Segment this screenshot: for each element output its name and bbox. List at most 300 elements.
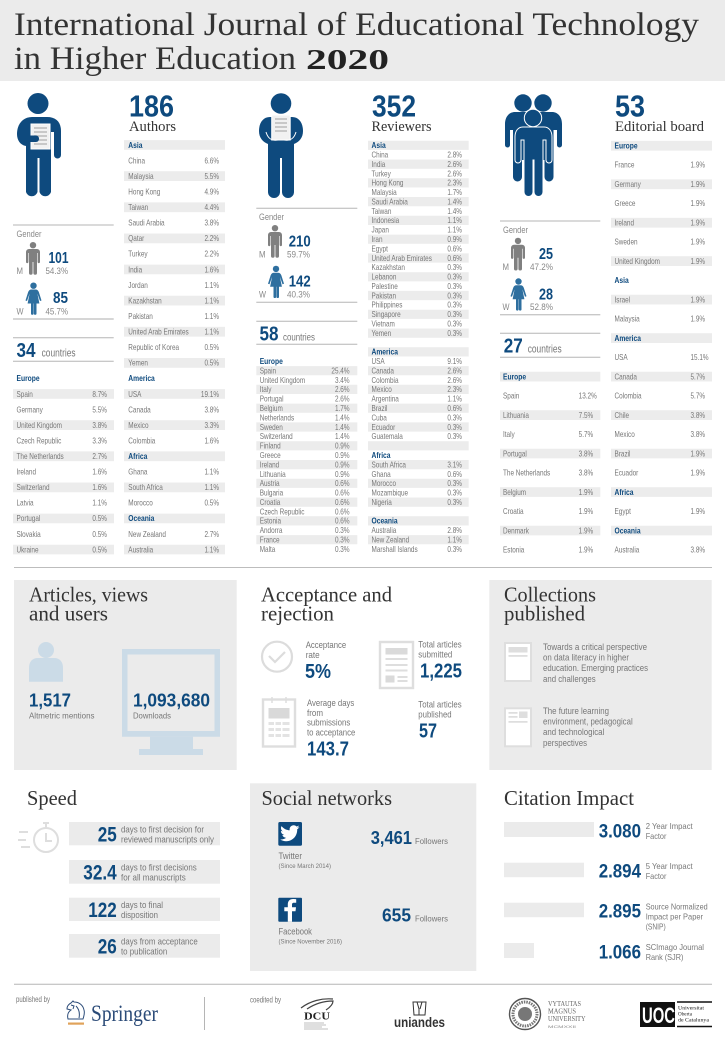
authors list: Europe: Spain xyxy=(16,389,33,399)
editorial board countries count xyxy=(500,333,600,358)
reviewers list: Asia, America, Africa, Oceania: 0.3% xyxy=(447,544,462,554)
citation row: 5 year impact factor: Factor xyxy=(646,871,667,881)
citation row: 2 year impact factor: 2 Year Impact xyxy=(646,821,693,831)
reviewers list: Asia, America, Africa, Oceania: 0.3% xyxy=(447,281,462,291)
editorial board list: Europe, Asia, America, Africa, Oceania: Mexico xyxy=(614,429,635,439)
editorial board list: Europe countries: Europe xyxy=(503,372,526,382)
text: collection 2: and technological xyxy=(543,727,604,737)
reviewers list: Asia, America, Africa, Oceania: Ghana xyxy=(372,469,392,479)
authors list: Europe: 5.5% xyxy=(92,405,107,415)
editorial board list: Europe, Asia, America, Africa, Oceania: 1.9% xyxy=(691,506,706,516)
editorial board list: Europe, Asia, America, Africa, Oceania: United Kingdom xyxy=(614,256,660,266)
reviewers list: Asia, America, Africa, Oceania: Brazil xyxy=(372,403,388,413)
authors list: Asia, America, Africa, Oceania: India xyxy=(128,265,143,275)
stat: total articles published: 57 xyxy=(419,720,437,742)
logo: Springer xyxy=(67,1001,158,1026)
authors list: Asia, America, Africa, Oceania: 0.5% xyxy=(204,358,220,368)
heading: articles, views and users xyxy=(29,583,148,626)
citation row: SJR: SCImago Journal xyxy=(646,942,704,952)
authors list: Asia, America, Africa, Oceania: 4.9% xyxy=(204,187,220,197)
authors list: Asia, America, Africa, Oceania: Africa xyxy=(128,451,148,461)
reviewers list: Europe: Greece xyxy=(260,450,281,460)
reviewers list: Europe: 1.4% xyxy=(335,413,350,423)
reviewers countries count: countries xyxy=(283,332,315,344)
authors list: Europe: 3.8% xyxy=(92,420,107,430)
authors list: Europe: 0.5% xyxy=(92,529,107,539)
authors list: Asia, America, Africa, Oceania: Qatar xyxy=(128,233,145,243)
panel: collections published xyxy=(489,580,712,770)
stat: downloads xyxy=(133,690,210,720)
editorial board list: Europe, Asia, America, Africa, Oceania: 1.9% xyxy=(691,198,706,208)
reviewers list: Asia, America, Africa, Oceania: Palestine xyxy=(372,281,398,291)
editorial board list: Europe countries: 1.9% xyxy=(579,506,594,516)
editorial board list: Europe countries: 3.8% xyxy=(579,468,594,478)
citation row: SNIP xyxy=(504,902,708,932)
citation row: SNIP: (SNIP) xyxy=(646,922,666,932)
authors list: Asia, America, Africa, Oceania: 2.2% xyxy=(204,233,220,243)
authors gender block: W xyxy=(16,306,24,317)
editorial board list: Europe, Asia, America, Africa, Oceania: Egypt xyxy=(614,506,631,516)
authors list: Asia, America, Africa, Oceania: Colombia xyxy=(128,436,156,446)
editorial board list: Europe countries: 1.9% xyxy=(579,545,594,555)
icon: reviewer holding paper xyxy=(259,93,303,198)
authors list: Asia, America, Africa, Oceania: 1.1% xyxy=(204,545,220,555)
twitter block: Twitter xyxy=(278,851,302,861)
title banner: International Journal of Educational Technology xyxy=(14,7,700,43)
stat: total articles published: Total articles xyxy=(418,700,462,710)
authors list: Asia, America, Africa, Oceania: Ghana xyxy=(128,467,148,477)
reviewers list: Asia, America, Africa, Oceania: 1.1% xyxy=(447,225,462,235)
reviewers list: Europe: Finland xyxy=(260,441,281,451)
editorial board list: Europe countries: Lithuania xyxy=(503,410,530,420)
authors list: Asia, America, Africa, Oceania: 4.4% xyxy=(204,202,220,212)
reviewers list: Asia, America, Africa, Oceania: Canada xyxy=(372,366,395,376)
authors list: Asia, America, Africa, Oceania: United Arab Emirates xyxy=(128,327,189,337)
facebook block: Facebook xyxy=(278,926,312,936)
stat: facebook followers: 655 xyxy=(382,905,411,925)
reviewers list: Asia, America, Africa, Oceania: 1.7% xyxy=(447,187,462,197)
editorial board headline number: 53 xyxy=(615,88,645,124)
reviewers list: Europe: 2.6% xyxy=(335,394,350,404)
reviewers gender block: 40.3% xyxy=(287,290,310,301)
authors list: Asia, America, Africa, Oceania: 3.3% xyxy=(204,420,220,430)
authors list: Asia, America, Africa, Oceania: 1.1% xyxy=(204,311,220,321)
reviewers list: Asia, America, Africa, Oceania: Argentina xyxy=(372,394,400,404)
stat: acceptance rate: Acceptance xyxy=(306,640,346,650)
reviewers list: Asia, America, Africa, Oceania: Vietnam xyxy=(372,319,395,329)
editorial board list: Europe countries: 3.8% xyxy=(579,449,594,459)
reviewers list: Europe: 0.9% xyxy=(335,441,350,451)
authors list: Asia, America, Africa, Oceania: 3.8% xyxy=(204,405,220,415)
reviewers list: Asia, America, Africa, Oceania: Morocco xyxy=(372,478,396,488)
heading: speed: Speed xyxy=(27,786,77,810)
editorial board list: Europe, Asia, America, Africa, Oceania: 3.8% xyxy=(691,545,706,555)
speed row 3 xyxy=(69,898,220,922)
editorial board gender block: M xyxy=(502,262,509,273)
editorial board list: Europe, Asia, America, Africa, Oceania: Greece xyxy=(614,198,635,208)
reviewers list: Europe: 0.6% xyxy=(335,516,350,526)
editorial board gender block: 25 xyxy=(539,246,553,263)
text: collection 2: The future learning xyxy=(543,706,609,716)
reviewers list: Asia, America, Africa, Oceania: 1.1% xyxy=(447,215,462,225)
panel: acceptance and rejection xyxy=(261,583,462,760)
reviewers list: Asia, America, Africa, Oceania: 0.3% xyxy=(447,422,462,432)
authors list: Europe: Germany xyxy=(16,405,43,415)
authors list: Asia, America, Africa, Oceania: Morocco xyxy=(128,498,153,508)
icon: document xyxy=(380,642,413,688)
reviewers list: Asia, America, Africa, Oceania: 2.3% xyxy=(447,178,462,188)
editorial board list: Europe countries: Italy xyxy=(503,429,515,439)
reviewers list: Asia, America, Africa, Oceania: Lebanon xyxy=(372,272,396,282)
reviewers list: Europe: 0.9% xyxy=(335,460,350,470)
editorial board list: Europe, Asia, America, Africa, Oceania: America xyxy=(614,333,642,343)
reviewers list: Asia, America, Africa, Oceania: 0.3% xyxy=(447,328,462,338)
stat: downloads: 1,093,680 xyxy=(133,690,210,710)
authors list: Europe: Switzerland xyxy=(16,482,50,492)
reviewers list: Asia, America, Africa, Oceania: Asia xyxy=(372,140,386,150)
citation row: 2 year impact factor xyxy=(504,821,693,842)
text: collection 1: Towards a critical perspective xyxy=(543,642,647,652)
authors list: Asia, America, Africa, Oceania: 0.5% xyxy=(204,498,220,508)
citation row: 2 year impact factor: Factor xyxy=(646,831,667,841)
authors list: Asia, America, Africa, Oceania: Republic of Korea xyxy=(128,342,180,352)
reviewers list: Europe: Italy xyxy=(260,384,272,394)
authors list: Asia, America, Africa, Oceania xyxy=(124,140,225,555)
authors list: Asia, America, Africa, Oceania: Saudi Arabia xyxy=(128,218,165,228)
authors list: Europe: Portugal xyxy=(16,513,41,523)
stat: twitter followers xyxy=(371,828,448,848)
logo: UOC: de Catalunya xyxy=(678,1018,710,1024)
title banner xyxy=(0,0,725,81)
text: collection 1 xyxy=(543,642,648,684)
authors list: Asia, America, Africa, Oceania: Taiwan xyxy=(128,202,148,212)
speed row 4: days from acceptance xyxy=(121,935,198,946)
reviewers list: Europe: 0.6% xyxy=(335,497,350,507)
reviewers list: Europe: Austria xyxy=(260,478,280,488)
authors list: Asia, America, Africa, Oceania: 1.1% xyxy=(204,482,220,492)
speed row 4: 26 xyxy=(98,936,117,958)
text: collection 2: environment, pedagogical xyxy=(543,716,633,726)
authors list: Asia, America, Africa, Oceania: South Africa xyxy=(128,482,164,492)
panel: articles, views and users xyxy=(14,580,237,770)
reviewers list: Europe: Ireland xyxy=(260,460,279,470)
reviewers list: Europe: Bulgaria xyxy=(260,488,284,498)
authors list: Asia, America, Africa, Oceania: Hong Kong xyxy=(128,187,160,197)
editorial board list: Europe, Asia, America, Africa, Oceania: 1.9% xyxy=(691,218,706,228)
logo: UOC: Universitat xyxy=(678,1006,704,1012)
reviewers gender block: 210 xyxy=(289,234,311,251)
reviewers list: Europe: Lithuania xyxy=(260,469,287,479)
editorial board list: Europe, Asia, America, Africa, Oceania: Europe xyxy=(614,141,638,151)
reviewers list: Asia, America, Africa, Oceania: Philippines xyxy=(372,300,403,310)
reviewers list: Asia, America, Africa, Oceania: 2.3% xyxy=(447,384,462,394)
reviewers list: Asia, America, Africa, Oceania: Egypt xyxy=(372,244,388,254)
reviewers list: Europe: Netherlands xyxy=(260,413,295,423)
authors list: Asia, America, Africa, Oceania: Asia xyxy=(128,140,143,150)
logo: UOC: Oberta xyxy=(678,1012,693,1018)
authors list: Europe: 2.7% xyxy=(92,451,107,461)
reviewers list: Asia, America, Africa, Oceania: 0.6% xyxy=(447,469,462,479)
stat: facebook followers xyxy=(382,905,448,925)
authors list: Asia, America, Africa, Oceania: 2.7% xyxy=(204,529,220,539)
heading: collections published xyxy=(504,583,596,626)
reviewers list: Asia, America, Africa, Oceania: Taiwan xyxy=(372,206,391,216)
editorial board list: Europe, Asia, America, Africa, Oceania: 3.8% xyxy=(691,410,706,420)
published by label: published by xyxy=(16,995,50,1004)
reviewers gender block: 59.7% xyxy=(287,250,310,261)
editorial board list: Europe, Asia, America, Africa, Oceania: Malaysia xyxy=(614,314,641,324)
editorial board list: Europe, Asia, America, Africa, Oceania: Brazil xyxy=(614,449,631,459)
reviewers list: Asia, America, Africa, Oceania: Iran xyxy=(372,234,383,244)
reviewers list: Asia, America, Africa, Oceania: 9.1% xyxy=(447,356,462,366)
editorial board list: Europe, Asia, America, Africa, Oceania: Chile xyxy=(614,410,629,420)
editorial board list: Europe countries: 1.9% xyxy=(579,487,594,497)
reviewers list: Asia, America, Africa, Oceania: Kazakhstan xyxy=(372,262,405,272)
editorial board list: Europe countries: Croatia xyxy=(503,506,524,516)
stat: altmetric mentions: 1,517 xyxy=(29,690,71,710)
reviewers list: Europe: United Kingdom xyxy=(260,375,305,385)
editorial board list: Europe, Asia, America, Africa, Oceania: Canada xyxy=(614,372,638,382)
stat: total articles published xyxy=(418,700,462,742)
editorial board list: Europe countries: 13.2% xyxy=(579,391,597,401)
reviewers list: Europe: Switzerland xyxy=(260,431,293,441)
coedited by label: coedited by xyxy=(250,996,281,1004)
editorial board list: Europe, Asia, America, Africa, Oceania: Ireland xyxy=(614,218,634,228)
reviewers list: Europe: Czech Republic xyxy=(260,507,305,517)
reviewers list: Europe: 0.9% xyxy=(335,450,350,460)
editorial board list: Europe, Asia, America, Africa, Oceania: Asia xyxy=(614,275,629,285)
editorial board list: Europe, Asia, America, Africa, Oceania: 1.9% xyxy=(691,256,706,266)
authors gender block: 45.7% xyxy=(46,306,68,317)
authors list: Asia, America, Africa, Oceania: 19.1% xyxy=(201,389,220,399)
editorial board gender block: 47.2% xyxy=(530,262,553,273)
panel: authors xyxy=(13,88,225,555)
editorial board list: Europe countries: 7.5% xyxy=(579,410,594,420)
heading: collections published: published xyxy=(504,602,585,626)
reviewers list: Asia, America, Africa, Oceania: 3.1% xyxy=(447,460,462,470)
reviewers list: Europe: 0.6% xyxy=(335,488,350,498)
reviewers list: Europe: Croatia xyxy=(260,497,281,507)
stat: twitter followers: Followers xyxy=(415,836,448,846)
heading: acceptance and rejection: rejection xyxy=(261,602,334,626)
stat: altmetric mentions: Altmetric mentions xyxy=(29,710,94,720)
reviewers list: Asia, America, Africa, Oceania: 1.1% xyxy=(447,535,462,545)
stat: average days from submissions to acceptance xyxy=(307,698,355,760)
logo: DCU: DCU xyxy=(304,1010,330,1022)
citation row: SJR xyxy=(504,942,704,964)
citation row: SJR: 1.066 xyxy=(599,942,641,964)
reviewers list: Asia, America, Africa, Oceania: Hong Kong xyxy=(372,178,403,188)
icon: monitor xyxy=(122,649,220,755)
reviewers list: Asia, America, Africa, Oceania: Indonesia xyxy=(372,215,400,225)
stat: altmetric mentions xyxy=(29,690,94,720)
authors gender block: Gender xyxy=(16,229,42,240)
reviewers list: Asia, America, Africa, Oceania: 0.6% xyxy=(447,403,462,413)
reviewers list: Europe: 0.6% xyxy=(335,478,350,488)
authors list: Europe: United Kingdom xyxy=(16,420,62,430)
authors list: Europe: Latvia xyxy=(16,498,34,508)
authors gender block xyxy=(13,225,114,319)
logo: uniandes xyxy=(394,1002,445,1030)
authors list: Asia, America, Africa, Oceania: Turkey xyxy=(128,249,148,259)
reviewers list: Asia, America, Africa, Oceania: 1.4% xyxy=(447,206,462,216)
authors list: Europe: The Netherlands xyxy=(16,451,64,461)
stat: average days from submissions to acceptance: from xyxy=(307,708,323,718)
authors list: Asia, America, Africa, Oceania: Malaysia xyxy=(128,171,154,181)
authors list: Asia, America, Africa, Oceania: 3.8% xyxy=(204,218,220,228)
reviewers list: Asia, America, Africa, Oceania: 0.3% xyxy=(447,272,462,282)
panel: editorial board xyxy=(500,88,712,555)
editorial board gender block: 52.8% xyxy=(530,302,553,313)
reviewers list: Asia, America, Africa, Oceania: 2.6% xyxy=(447,375,462,385)
authors list: Asia, America, Africa, Oceania: Pakistan xyxy=(128,311,153,321)
icon: editorial board group xyxy=(505,94,562,196)
authors list: Europe: Slovakia xyxy=(16,529,42,539)
icon: author holding paper xyxy=(17,93,61,196)
stat: total articles submitted: Total articles xyxy=(418,640,462,650)
reviewers list: Asia, America, Africa, Oceania: 0.6% xyxy=(447,253,462,263)
reviewers list: Asia, America, Africa, Oceania: Japan xyxy=(372,225,389,235)
reviewers list: Europe: 2.6% xyxy=(335,384,350,394)
editorial board list: Europe, Asia, America, Africa, Oceania: 1.9% xyxy=(691,314,706,324)
speed row 1: days to first decision for xyxy=(121,823,204,834)
editorial board gender block: W xyxy=(502,302,510,313)
editorial board gender block: 28 xyxy=(539,286,553,303)
logo: Vytautas Magnus University xyxy=(510,998,586,1030)
reviewers list: Europe: 0.6% xyxy=(335,507,350,517)
authors list: Asia, America, Africa, Oceania: 2.2% xyxy=(204,249,220,259)
authors list: Asia, America, Africa, Oceania: Canada xyxy=(128,405,152,415)
reviewers list: Europe: Portugal xyxy=(260,394,284,404)
reviewers countries count xyxy=(256,321,357,346)
reviewers list: Asia, America, Africa, Oceania: Ecuador xyxy=(372,422,396,432)
editorial board list: Europe, Asia, America, Africa, Oceania: Germany xyxy=(614,179,641,189)
heading: collections published: Collections xyxy=(504,583,596,607)
reviewers list: Europe: Belgium xyxy=(260,403,283,413)
authors list: Asia, America, Africa, Oceania: 1.1% xyxy=(204,467,220,477)
editorial board list: Europe countries xyxy=(500,372,600,555)
speed row 1 xyxy=(69,822,220,846)
reviewers list: Asia, America, Africa, Oceania: Guatemala xyxy=(372,431,404,441)
reviewers list: Asia, America, Africa, Oceania: 2.6% xyxy=(447,366,462,376)
editorial board list: Europe countries: Estonia xyxy=(503,545,525,555)
text: collection 1: education. Emerging practices xyxy=(543,663,648,673)
authors gender block: 101 xyxy=(48,250,69,267)
stat: twitter followers: 3,461 xyxy=(371,828,412,848)
reviewers list: Asia, America, Africa, Oceania: 0.3% xyxy=(447,300,462,310)
reviewers list: Asia, America, Africa, Oceania: 0.3% xyxy=(447,413,462,423)
authors list: Europe: 1.6% xyxy=(92,467,107,477)
reviewers list: Europe: Sweden xyxy=(260,422,283,432)
reviewers list: Asia, America, Africa, Oceania: United Arab Emirates xyxy=(372,253,432,263)
speed row 3: disposition xyxy=(121,909,158,920)
authors heading: Authors xyxy=(129,119,176,135)
reviewers gender block: M xyxy=(259,250,266,261)
panel: social networks xyxy=(250,783,476,971)
reviewers list: Asia, America, Africa, Oceania: Singapore xyxy=(372,309,401,319)
authors countries count xyxy=(13,338,114,362)
reviewers list: Asia, America, Africa, Oceania: Marshall Islands xyxy=(372,544,418,554)
facebook block xyxy=(278,898,342,945)
reviewers list: Europe: Malta xyxy=(260,544,276,554)
panel: reviewers xyxy=(256,88,469,554)
reviewers heading: Reviewers xyxy=(372,119,432,135)
editorial board countries count: 27 xyxy=(504,336,523,358)
stat: acceptance rate: rate xyxy=(306,650,320,660)
reviewers gender block xyxy=(256,208,357,302)
logo: Vytautas Magnus University: MCMXXII xyxy=(548,1025,576,1029)
reviewers list: Europe xyxy=(256,356,357,554)
reviewers gender block: 142 xyxy=(289,274,311,291)
citation row: SNIP: Source Normalized xyxy=(646,902,708,912)
reviewers list: Asia, America, Africa, Oceania: 1.1% xyxy=(447,394,462,404)
speed row 2: days to first decisions xyxy=(121,861,197,872)
editorial board list: Europe countries: Denmark xyxy=(503,526,529,536)
text: collection 1: on data literacy in higher xyxy=(543,652,629,662)
editorial board countries count: countries xyxy=(528,344,562,356)
logo: Springer: Springer xyxy=(91,1001,158,1026)
title banner: in Higher Education xyxy=(14,41,296,77)
citation row: 2 year impact factor: 3.080 xyxy=(599,822,641,842)
editorial board list: Europe, Asia, America, Africa, Oceania: 5.7% xyxy=(691,391,706,401)
editorial board list: Europe, Asia, America, Africa, Oceania: 1.9% xyxy=(691,295,706,305)
reviewers list: Asia, America, Africa, Oceania: New Zealand xyxy=(372,535,409,545)
reviewers list: Europe: France xyxy=(260,535,280,545)
editorial board list: Europe, Asia, America, Africa, Oceania: 1.9% xyxy=(691,237,706,247)
editorial board list: Europe countries: Belgium xyxy=(503,487,526,497)
authors list: Europe: 1.1% xyxy=(92,498,107,508)
citation row: SNIP: 2.895 xyxy=(599,902,641,922)
reviewers list: Asia, America, Africa, Oceania: China xyxy=(372,150,389,160)
reviewers list: Europe: 0.9% xyxy=(335,469,350,479)
stat: average days from submissions to acceptance: Average days xyxy=(307,698,355,708)
authors list: Asia, America, Africa, Oceania: 1.1% xyxy=(204,280,220,290)
reviewers list: Asia, America, Africa, Oceania: Saudi Arabia xyxy=(372,197,409,207)
reviewers gender block: Gender xyxy=(259,212,285,223)
reviewers list: Asia, America, Africa, Oceania: Turkey xyxy=(372,169,391,179)
stat: average days from submissions to acceptance: 143.7 xyxy=(307,738,349,760)
editorial board list: Europe, Asia, America, Africa, Oceania: Australia xyxy=(614,545,640,555)
twitter block: (Since March 2014) xyxy=(278,863,331,870)
speed row 2: for all manuscripts xyxy=(121,871,186,882)
logo: Vytautas Magnus University: VYTAUTAS xyxy=(548,1000,581,1008)
editorial board list: Europe, Asia, America, Africa, Oceania: 15.1% xyxy=(691,352,709,362)
speed row 3: days to final xyxy=(121,899,163,910)
reviewers list: Asia, America, Africa, Oceania: Mozambique xyxy=(372,488,408,498)
editorial board list: Europe, Asia, America, Africa, Oceania: France xyxy=(614,160,634,170)
editorial board list: Europe countries: 1.9% xyxy=(579,526,594,536)
reviewers list: Europe: 0.3% xyxy=(335,535,350,545)
authors list: Europe xyxy=(13,373,114,555)
authors list: Europe: 3.3% xyxy=(92,436,107,446)
authors list: Asia, America, Africa, Oceania: 1.6% xyxy=(204,265,220,275)
authors headline number: 186 xyxy=(129,88,174,124)
editorial board list: Europe, Asia, America, Africa, Oceania: 1.9% xyxy=(691,449,706,459)
logo: DCU xyxy=(301,999,333,1029)
logo: Vytautas Magnus University: MAGNUS xyxy=(548,1008,576,1016)
reviewers list: Europe: 1.4% xyxy=(335,431,350,441)
facebook block: (Since November 2016) xyxy=(278,938,342,945)
heading: acceptance and rejection xyxy=(261,583,392,626)
icon: collection document 1 xyxy=(505,643,531,681)
authors gender block: 85 xyxy=(53,290,68,307)
stat: total articles submitted: 1,225 xyxy=(420,660,462,682)
heading: articles, views and users: and users xyxy=(29,602,108,626)
heading: social networks: Social networks xyxy=(262,786,392,810)
stat: acceptance rate xyxy=(305,640,346,683)
reviewers list: Asia, America, Africa, Oceania: Cuba xyxy=(372,413,388,423)
authors list: Asia, America, Africa, Oceania: Oceania xyxy=(128,513,155,523)
